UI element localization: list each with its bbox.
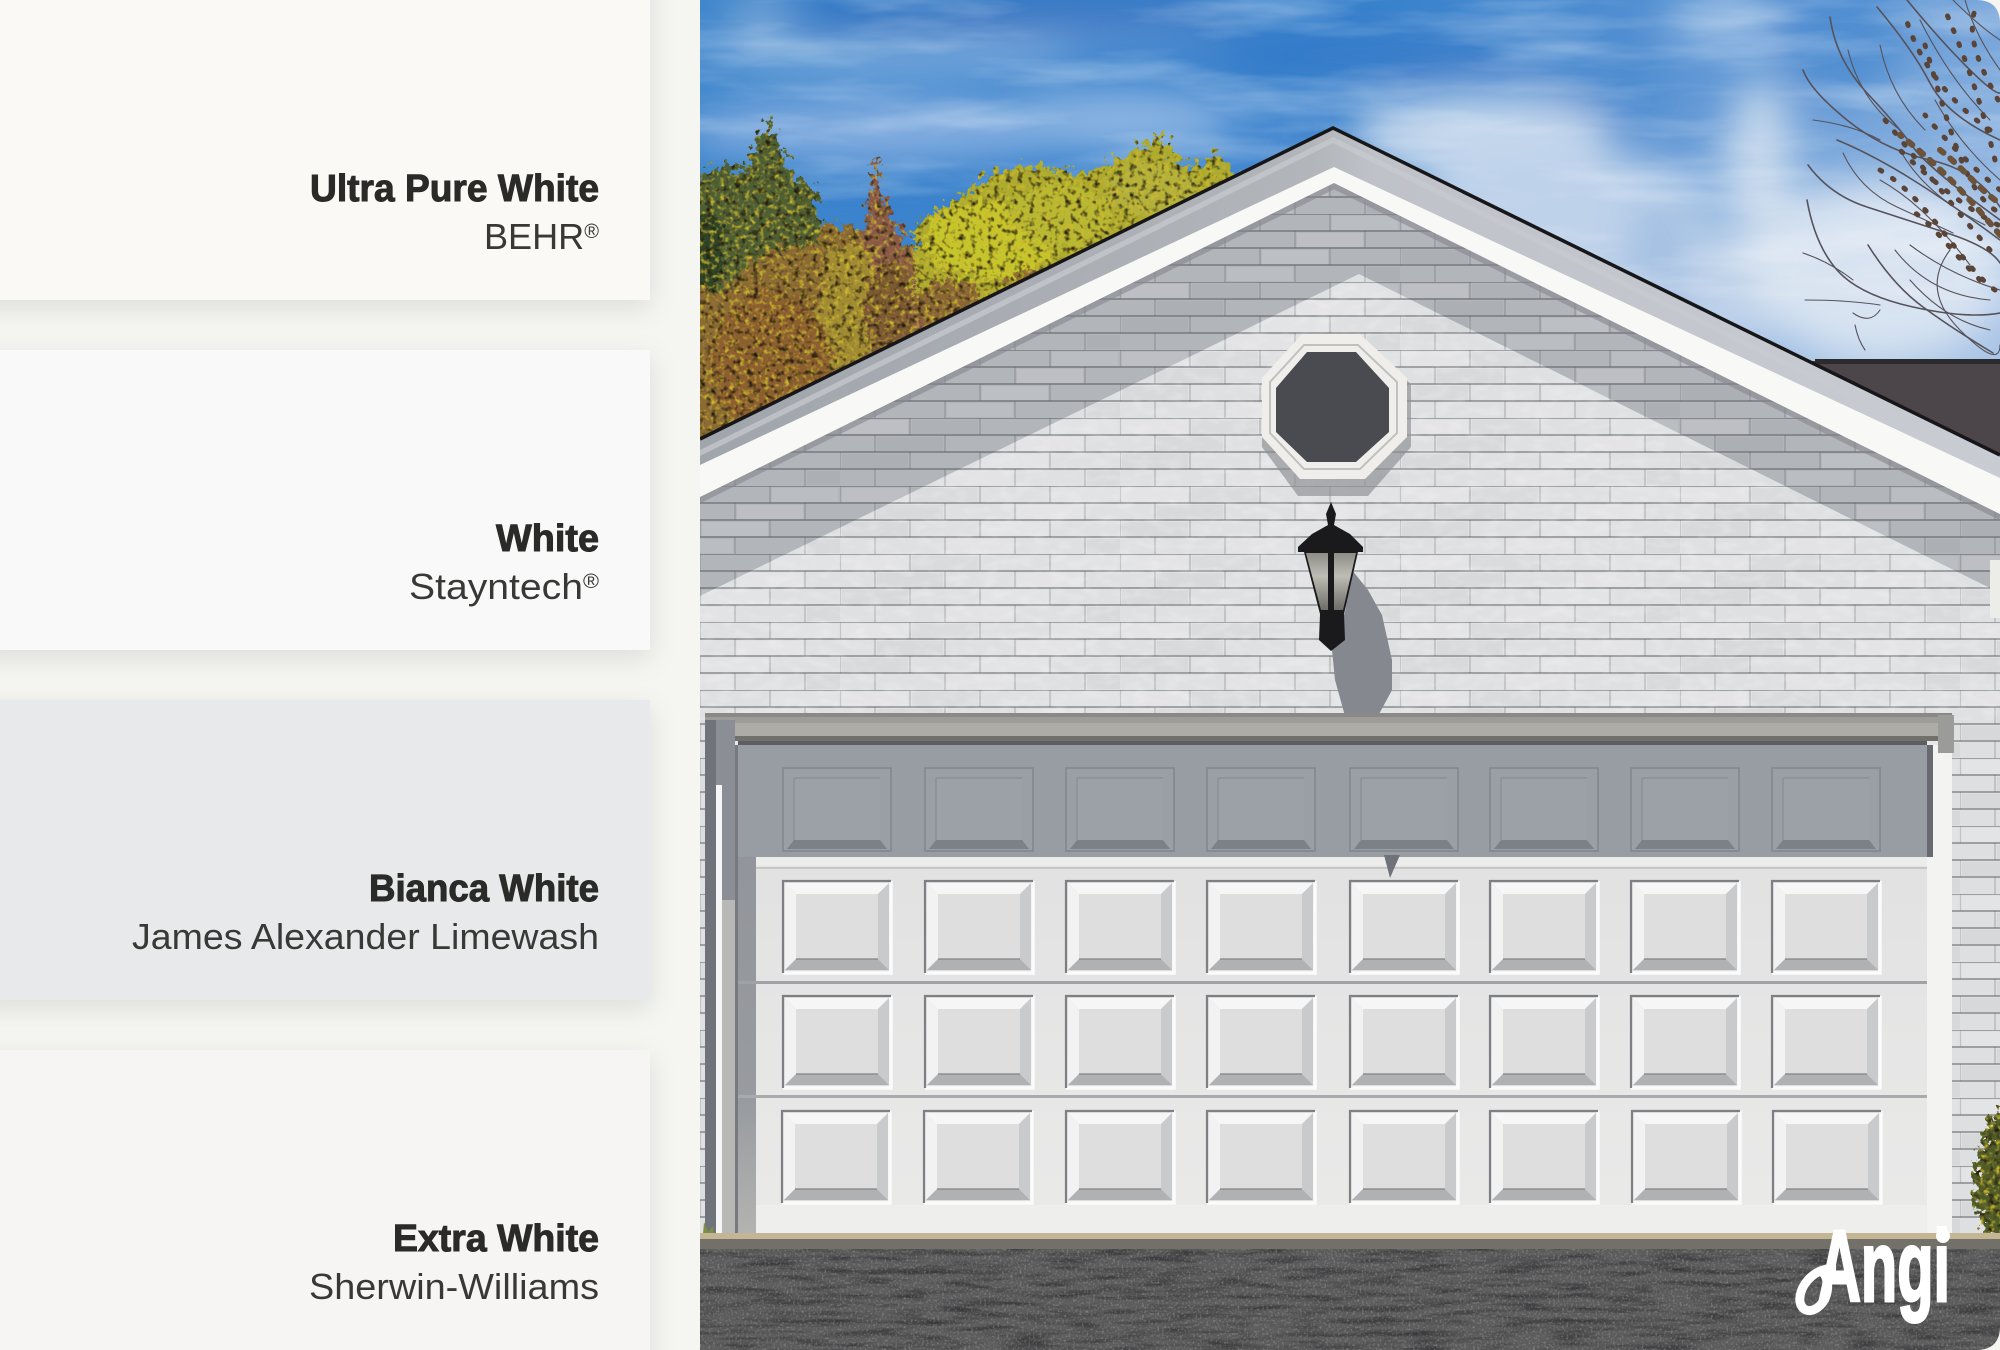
garage door (738, 745, 1927, 1233)
second row panels (783, 881, 1880, 973)
garage door frame (705, 713, 1954, 1243)
octagonal window (1262, 334, 1411, 496)
wall lantern with shadow (1298, 502, 1392, 716)
swatch card: Bianca White (0, 700, 650, 1000)
fourth row panels (782, 1111, 1881, 1203)
swatch card: Ultra Pure White: Ultra Pure White (310, 168, 599, 210)
swatch card: Bianca White: Bianca White (369, 868, 599, 910)
top row panels in shade (783, 768, 1880, 851)
swatch card: Ultra Pure White: BEHR (484, 216, 584, 257)
driveway (700, 1233, 2000, 1350)
swatch card: Bianca White: James Alexander Limewash (132, 916, 599, 957)
swatch card: Ultra Pure White: ® (584, 221, 599, 243)
trees behind the roof (680, 118, 1240, 460)
swatch card: White: Stayntech (409, 566, 569, 607)
grass tuft at left (703, 1222, 714, 1233)
swatch card: Ultra Pure White (0, 0, 650, 300)
swatch card: Extra White (0, 1050, 650, 1350)
dark side roof (1811, 361, 2000, 458)
sky with clouds (680, 0, 2000, 480)
brick wall (700, 170, 2000, 1250)
swatch card: Extra White: Sherwin-Williams (309, 1266, 599, 1307)
bare tree branches (1803, 0, 2000, 355)
swatch card: Extra White: Extra White (393, 1218, 599, 1260)
third row panels (783, 996, 1880, 1088)
swatch card: White: ® (583, 571, 599, 593)
shrub at right (1974, 1108, 2000, 1250)
panel: paint swatches (0, 0, 650, 1350)
swatch card: White (0, 350, 650, 650)
logo: Angi (1800, 1211, 1950, 1323)
photo: white brick garage (680, 0, 2000, 1350)
roof soffit and white fascia (700, 128, 2000, 517)
swatch card: White: White (496, 518, 599, 560)
